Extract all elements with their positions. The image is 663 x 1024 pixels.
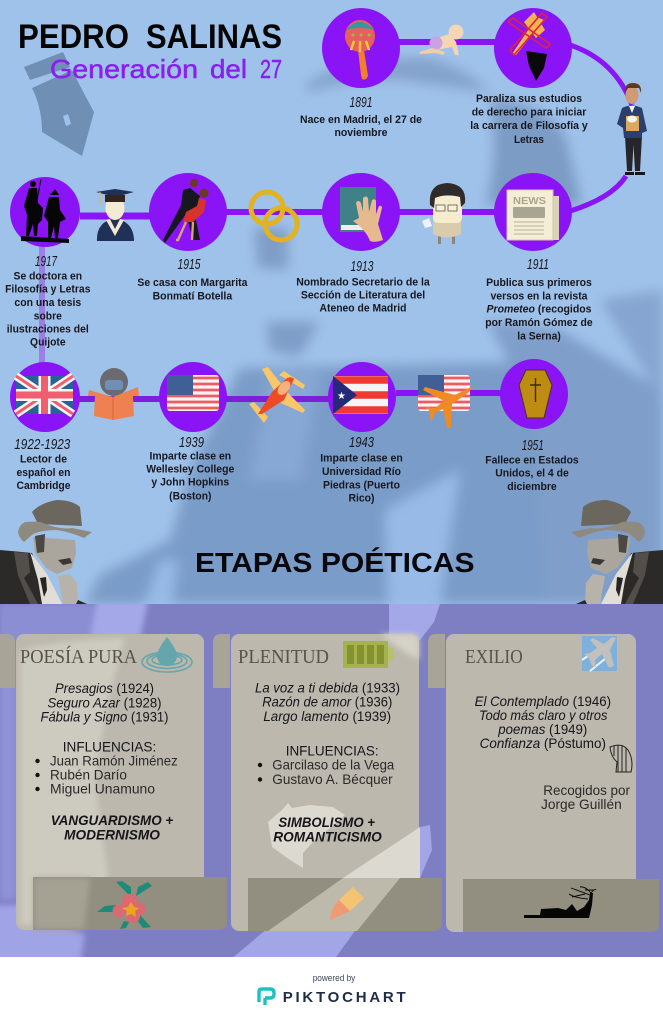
event 1939: 1939 bbox=[179, 434, 204, 451]
works: poemas (1949) bbox=[497, 721, 587, 737]
works: Razón de amor (1936) bbox=[262, 694, 392, 710]
influences bbox=[258, 743, 394, 787]
icon: wedding rings bbox=[251, 192, 297, 240]
icon: orange plane bbox=[249, 367, 305, 423]
timeline path bbox=[42, 42, 632, 399]
event 1891: Nace en Madrid, el 27 de bbox=[300, 114, 422, 126]
subtitle: del bbox=[210, 54, 247, 84]
influences: INFLUENCIAS: bbox=[63, 739, 156, 755]
title: SALINAS bbox=[146, 18, 282, 56]
event 1951: Fallece en Estados bbox=[485, 454, 579, 466]
movements: VANGUARDISMO + bbox=[51, 812, 173, 828]
icon: Puerto Rico flag: ★ bbox=[337, 391, 346, 402]
icon: harp bbox=[610, 745, 632, 772]
event 1913: Nombrado Secretario de la bbox=[296, 276, 431, 288]
icon: battery bbox=[343, 641, 394, 668]
event 1939: Imparte clase en bbox=[150, 450, 231, 462]
event 1911 bbox=[485, 173, 593, 342]
event 1915 bbox=[137, 173, 248, 302]
movements bbox=[273, 814, 382, 845]
works: El Contemplado (1946) bbox=[475, 693, 611, 709]
event 1915: Se casa con Margarita bbox=[137, 277, 248, 289]
event 1951: 1951 bbox=[522, 437, 544, 454]
event 1939 bbox=[146, 362, 234, 502]
icon: Don Quijote silhouette bbox=[21, 179, 69, 243]
icon: US flag with airliner bbox=[418, 375, 473, 428]
event 1911: versos en la revista bbox=[490, 290, 588, 302]
event 1913: Sección de Literatura del bbox=[301, 289, 425, 301]
icon: plane tile bbox=[582, 636, 617, 671]
icon: child reading bbox=[88, 368, 139, 420]
event 1913 bbox=[296, 173, 431, 315]
event 1891: noviembre bbox=[334, 127, 388, 139]
panel: poesía pura bbox=[0, 634, 227, 930]
event 1911: Prometeo (recogidos bbox=[486, 304, 592, 316]
influences bbox=[35, 739, 178, 797]
background: purple lower band bbox=[0, 600, 663, 965]
event 1917: con una tesis bbox=[14, 297, 81, 309]
works bbox=[475, 693, 611, 751]
influences: INFLUENCIAS: bbox=[286, 743, 379, 759]
panel: exilio bbox=[428, 634, 659, 932]
powered by: powered by bbox=[313, 973, 356, 984]
event 1943: Imparte clase en bbox=[320, 453, 403, 465]
works: Presagios (1924) bbox=[55, 680, 154, 696]
works: Confianza (Póstumo) bbox=[480, 735, 606, 751]
influences: Gustavo A. Bécquer bbox=[272, 771, 393, 787]
icon: pen nib watermark bbox=[24, 52, 94, 156]
icon: newspaper: NEWS bbox=[513, 196, 546, 207]
event 1917: Se doctora en bbox=[14, 270, 82, 282]
event 1943: Universidad Río bbox=[322, 466, 401, 478]
icon: dancing couple bbox=[163, 179, 208, 243]
icon: Puerto Rico flag bbox=[333, 376, 388, 414]
event 1951: diciembre bbox=[507, 481, 557, 493]
icon: crawling baby bbox=[419, 24, 464, 55]
portrait left bbox=[0, 500, 92, 604]
icon: pencil tip bbox=[330, 887, 364, 920]
event 1891 bbox=[300, 8, 422, 139]
event 1913: 1913 bbox=[350, 258, 374, 275]
icon: newspaper bbox=[507, 190, 559, 240]
event 1922-1923: Cambridge bbox=[16, 480, 70, 492]
event: estudios: de derecho para iniciar bbox=[472, 106, 587, 118]
piktochart wordmark: PIKTOCHART bbox=[283, 989, 406, 1006]
icon: crossed law symbol bbox=[508, 12, 550, 55]
event: estudios: Letras bbox=[514, 134, 544, 146]
event 1922-1923 bbox=[10, 362, 80, 492]
event 1922-1923: Lector de bbox=[20, 454, 67, 466]
icon: tree and boat silhouette bbox=[524, 887, 596, 918]
icon: flower bbox=[97, 881, 152, 929]
event 1917: ilustraciones del bbox=[7, 324, 89, 336]
title: PEDRO bbox=[18, 18, 129, 56]
title bbox=[18, 18, 282, 56]
event 1891: 1891 bbox=[350, 94, 372, 111]
event 1911: 1911 bbox=[527, 256, 549, 273]
icon: fountain pen nib bbox=[526, 51, 547, 81]
note: Recogidos por bbox=[543, 782, 630, 798]
panel title: PLENITUD bbox=[238, 646, 329, 668]
event 1939: y John Hopkins bbox=[151, 477, 229, 489]
event 1917: Quijote bbox=[30, 337, 66, 349]
event 1917 bbox=[5, 177, 90, 349]
event 1943: Piedras (Puerto bbox=[323, 479, 400, 491]
icon: piktochart logo bbox=[259, 989, 274, 1005]
subtitle bbox=[50, 54, 282, 84]
works bbox=[40, 680, 168, 725]
note bbox=[541, 782, 630, 812]
works: Largo lamento (1939) bbox=[263, 708, 391, 724]
event 1915: 1915 bbox=[178, 256, 201, 273]
works bbox=[255, 679, 400, 724]
panel title: POESÍA PURA bbox=[20, 645, 138, 668]
heading: etapas poéticas: ETAPAS POÉTICAS bbox=[195, 547, 474, 578]
icon: hand on book bbox=[340, 187, 383, 242]
event 1915: Bonmatí Botella bbox=[153, 290, 233, 302]
event 1943: Rico) bbox=[348, 492, 375, 504]
event: estudios bbox=[470, 8, 589, 146]
icon: graduate bbox=[96, 189, 134, 241]
event 1917: 1917 bbox=[35, 253, 57, 270]
movements: MODERNISMO bbox=[64, 827, 160, 843]
influences: Garcilaso de la Vega bbox=[272, 757, 394, 773]
event 1917: Filosofía y Letras bbox=[5, 284, 90, 296]
works: Fábula y Signo (1931) bbox=[40, 709, 168, 725]
event 1922-1923: español en bbox=[16, 467, 71, 479]
icon: rattle bbox=[345, 20, 375, 80]
event 1939: Wellesley College bbox=[146, 464, 234, 476]
icon: UK flag bbox=[16, 376, 73, 414]
event 1951 bbox=[485, 359, 579, 493]
event 1911: por Ramón Gómez de bbox=[485, 317, 593, 329]
event: estudios: la carrera de Filosofía y bbox=[470, 120, 589, 132]
note: Jorge Guillén bbox=[541, 796, 622, 812]
movements: ROMANTICISMO bbox=[273, 829, 382, 845]
event 1939: (Boston) bbox=[169, 490, 212, 502]
event 1943: 1943 bbox=[349, 434, 374, 451]
icon: coffin bbox=[519, 370, 552, 418]
works: Seguro Azar (1928) bbox=[48, 695, 162, 711]
event 1943 bbox=[320, 362, 403, 504]
footer band bbox=[0, 957, 663, 1024]
movements: SIMBOLISMO + bbox=[278, 814, 375, 830]
event 1922-1923: 1922-1923 bbox=[14, 436, 71, 453]
event 1951: Unidos, el 4 de bbox=[495, 468, 569, 480]
icon: water drop bbox=[142, 637, 192, 672]
event 1911: la Serna) bbox=[517, 330, 561, 342]
event: estudios: Paraliza sus estudios bbox=[476, 93, 582, 105]
event 1911: Publica sus primeros bbox=[486, 277, 592, 289]
event 1913: Ateneo de Madrid bbox=[320, 303, 406, 315]
influences: Juan Ramón Jiménez bbox=[50, 753, 178, 769]
panel title: EXILIO bbox=[465, 646, 523, 668]
works: Todo más claro y otros bbox=[479, 707, 607, 723]
movements bbox=[51, 812, 173, 843]
background: blue portrait bbox=[0, 0, 663, 604]
works: La voz a ti debida (1933) bbox=[255, 679, 400, 695]
icon: man with glasses bbox=[422, 183, 465, 244]
panel: plenitud bbox=[213, 634, 442, 931]
icon: US flag bbox=[167, 375, 219, 411]
event 1917: sobre bbox=[34, 310, 62, 322]
influences: Rubén Darío bbox=[50, 767, 127, 783]
subtitle: 27 bbox=[260, 54, 282, 84]
subtitle: Generación bbox=[50, 54, 198, 84]
portrait right bbox=[571, 500, 663, 604]
influences: Miguel Unamuno bbox=[50, 781, 155, 797]
icon: standing man with book bbox=[617, 83, 647, 175]
